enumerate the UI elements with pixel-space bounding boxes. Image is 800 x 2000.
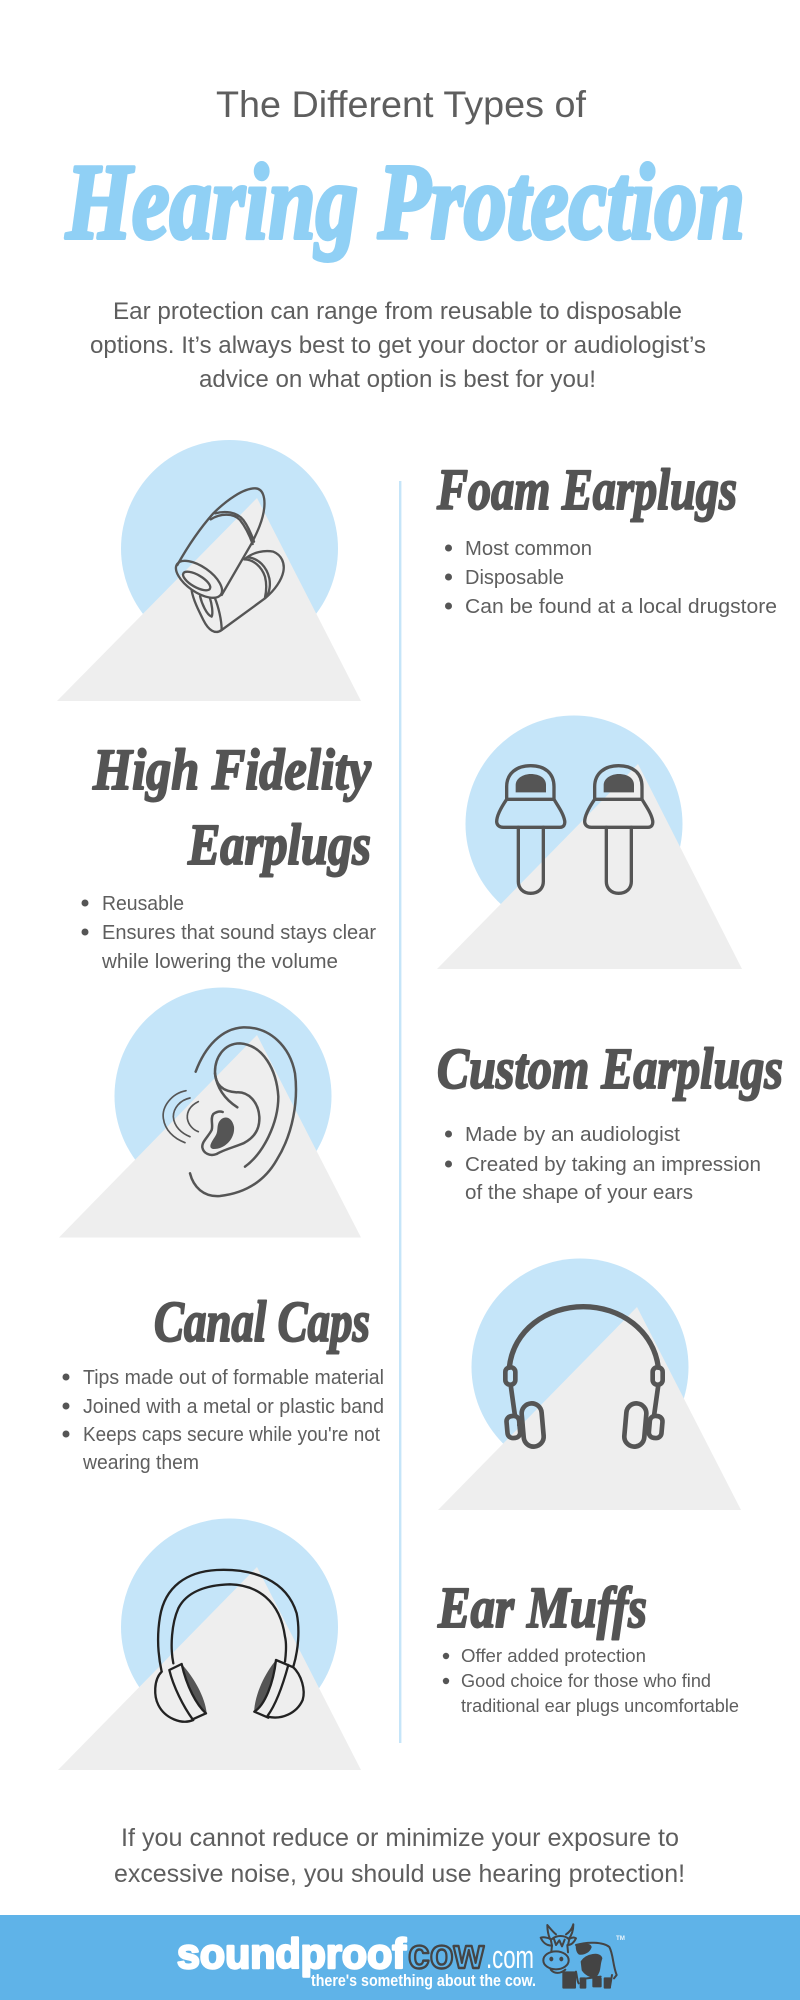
intro paragraph: advice on what option is best for you! bbox=[199, 366, 596, 393]
heading: ear muffs: Muffs bbox=[526, 1575, 647, 1640]
logo wordmark: .com bbox=[486, 1939, 534, 1975]
panel: ear muffs illustration bbox=[58, 1518, 361, 1770]
logo wordmark: TM bbox=[616, 1936, 625, 1942]
list: ear muffs: traditional ear plugs uncomfortable bbox=[461, 1696, 739, 1716]
list: ear muffs: Offer added protection bbox=[461, 1646, 646, 1666]
panel: high fidelity earplugs text bbox=[82, 737, 376, 973]
list: ear muffs: Good choice for those who find bbox=[461, 1671, 711, 1691]
list: custom earplugs: Created by taking an impression bbox=[465, 1154, 761, 1176]
icon: high fidelity earplugs bbox=[497, 766, 653, 893]
list: canal caps: Keeps caps secure while you're not bbox=[83, 1424, 380, 1446]
intro paragraph: options. It’s always best to get your doctor or audiologist’s bbox=[90, 332, 706, 359]
closing statement: excessive noise, you should use hearing protection! bbox=[114, 1860, 685, 1888]
logo wordmark: cow bbox=[408, 1930, 484, 1977]
list: foam earplugs: Most common bbox=[465, 538, 592, 560]
panel: foam earplugs text bbox=[436, 457, 777, 618]
heading: ear muffs bbox=[437, 1575, 647, 1640]
title bbox=[65, 84, 745, 262]
heading: high fidelity earplugs: Earplugs bbox=[187, 812, 371, 877]
panel: canal caps illustration bbox=[438, 1258, 741, 1510]
logo wordmark bbox=[177, 1930, 625, 1990]
list: canal caps: Joined with a metal or plastic band bbox=[83, 1396, 384, 1418]
icon: ear with sound waves bbox=[163, 1027, 296, 1196]
list: canal caps: Tips made out of formable material bbox=[83, 1367, 384, 1389]
icon: foam earplugs bbox=[170, 488, 284, 632]
closing statement: If you cannot reduce or minimize your exposure to bbox=[121, 1824, 679, 1852]
list: custom earplugs bbox=[445, 1124, 761, 1204]
intro paragraph bbox=[90, 298, 706, 393]
heading: high fidelity earplugs bbox=[92, 737, 371, 877]
list: foam earplugs: Can be found at a local drugstore bbox=[465, 596, 777, 618]
footer band bbox=[0, 1915, 800, 2000]
list: high fidelity earplugs: Ensures that sound stays clear bbox=[102, 922, 376, 944]
list: high fidelity earplugs bbox=[82, 893, 376, 973]
heading: high fidelity earplugs: High Fidelity bbox=[92, 737, 371, 802]
title: Hearing bbox=[65, 143, 358, 262]
panel: canal caps text bbox=[62, 1289, 384, 1474]
intro paragraph: Ear protection can range from reusable to disposable bbox=[113, 298, 682, 325]
panel: custom earplugs text bbox=[437, 1036, 783, 1204]
list: high fidelity earplugs: Reusable bbox=[102, 893, 184, 915]
list: custom earplugs: of the shape of your ears bbox=[465, 1182, 693, 1204]
list: foam earplugs bbox=[445, 538, 777, 618]
list: custom earplugs: Made by an audiologist bbox=[465, 1124, 680, 1146]
heading: canal caps: Canal Caps bbox=[154, 1289, 370, 1354]
center divider line bbox=[399, 481, 401, 1743]
panel: ear muffs text bbox=[437, 1575, 739, 1716]
icon: ear muffs bbox=[155, 1570, 304, 1722]
logo wordmark: there's something about the cow. bbox=[311, 1971, 536, 1990]
icon: cow mascot bbox=[541, 1924, 617, 1988]
list: canal caps: wearing them bbox=[82, 1452, 199, 1474]
logo wordmark: soundproof bbox=[177, 1930, 407, 1977]
panel: custom earplugs illustration bbox=[59, 988, 361, 1238]
heading: ear muffs: Ear bbox=[437, 1575, 514, 1640]
title: The Different Types of bbox=[216, 84, 587, 125]
list: ear muffs bbox=[443, 1646, 739, 1716]
list: high fidelity earplugs: while lowering the volume bbox=[101, 951, 338, 973]
list: canal caps bbox=[62, 1367, 384, 1474]
list: foam earplugs: Disposable bbox=[465, 567, 564, 589]
icon: canal caps headband bbox=[505, 1307, 663, 1447]
closing statement bbox=[114, 1824, 685, 1888]
panel: high fidelity earplugs illustration bbox=[437, 716, 742, 969]
panel: foam earplugs illustration bbox=[57, 440, 361, 701]
